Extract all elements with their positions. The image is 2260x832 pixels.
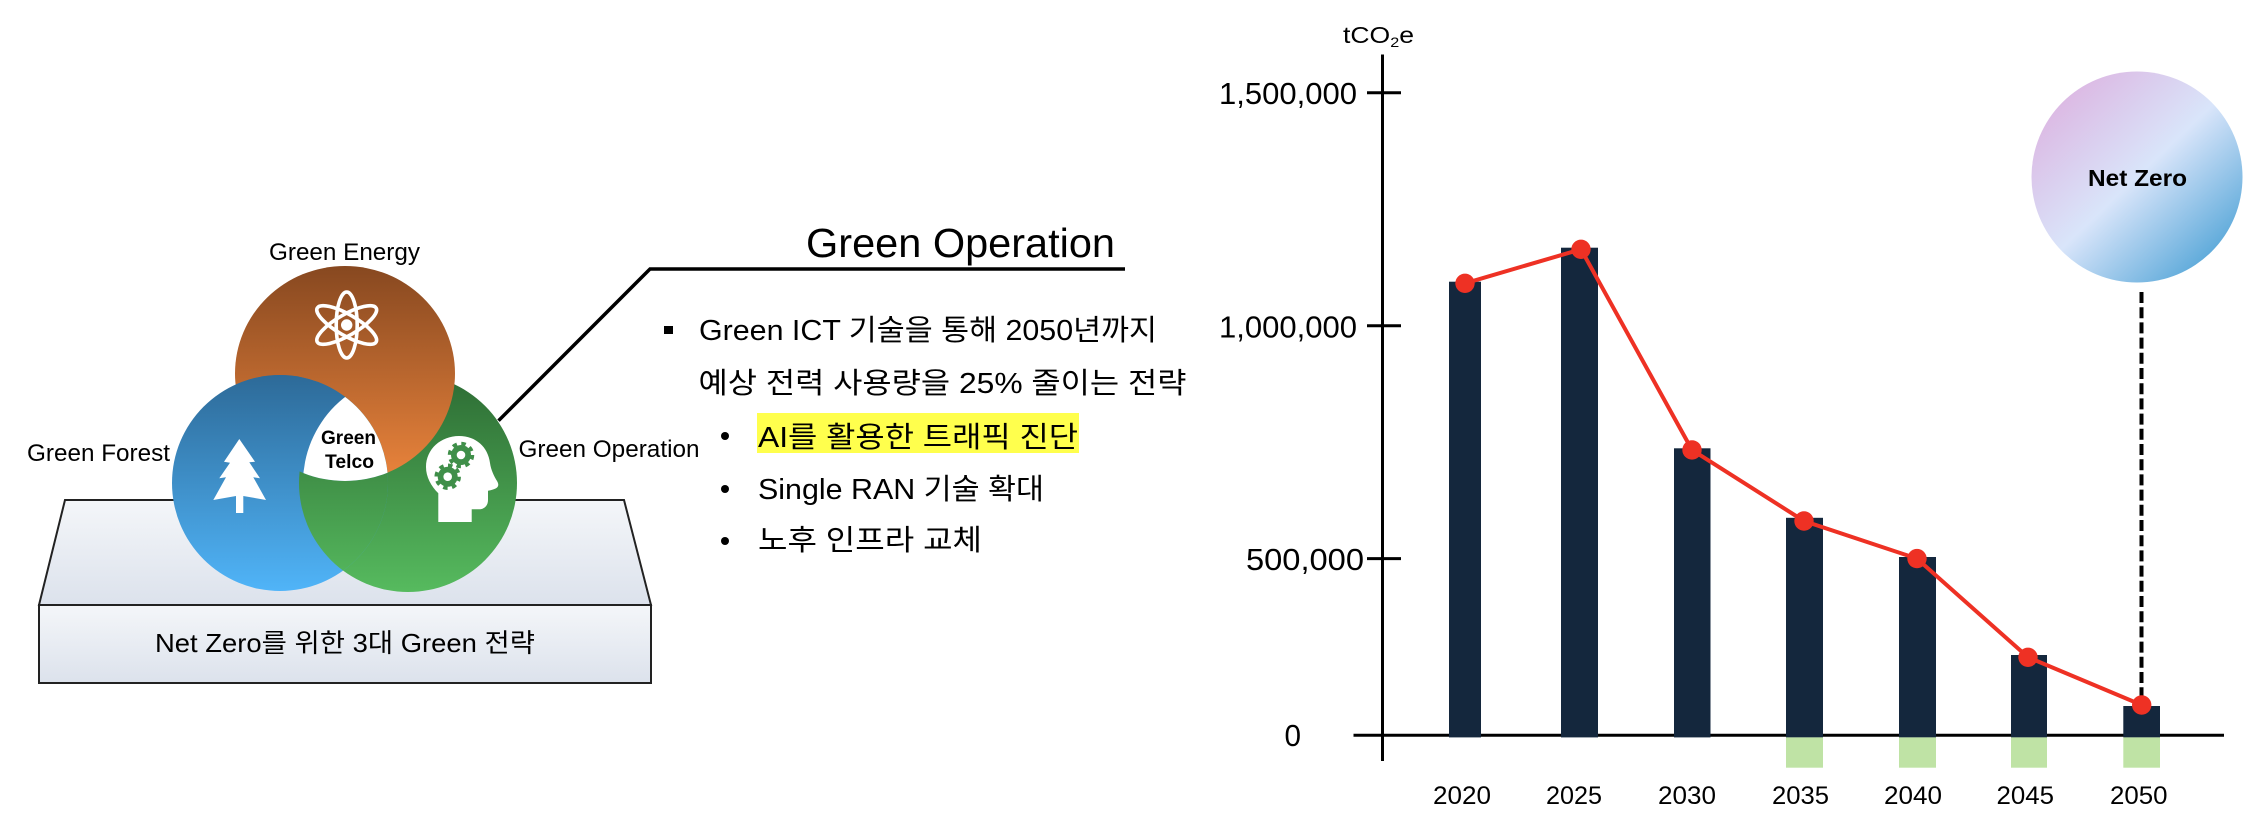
x axis labels — [1433, 782, 2168, 810]
label: Green Energy: Green Energy — [269, 239, 420, 266]
x axis labels: 2025 — [1546, 782, 1602, 810]
x axis labels: 2030 — [1658, 782, 1716, 810]
center label: Green Telco: Green — [321, 428, 376, 449]
callout line — [498, 269, 1125, 421]
main bullet text: Green ICT 기술을 통해 2050년까지 — [699, 315, 1157, 347]
center label: Green Telco: Telco — [325, 452, 374, 473]
platform caption: Net Zero를 위한 3대 Green 전략 — [155, 628, 535, 658]
x axis labels: 2045 — [1996, 782, 2054, 810]
Net Zero badge: Net Zero — [2088, 165, 2187, 191]
sub bullet: legacy infrastructure: 노후 인프라 교체 — [758, 525, 982, 557]
label: Green Forest: Green Forest — [27, 440, 170, 467]
unit label: 2 — [1390, 34, 1399, 50]
label: Green Operation: Green Operation — [518, 436, 700, 463]
icon: atom — [312, 292, 381, 358]
sub bullet: AI traffic diagnosis: AI를 활용한 트래픽 진단 — [758, 421, 1078, 454]
y axis labels: 0 — [1284, 718, 1301, 753]
sub bullet: AI traffic diagnosis — [721, 413, 1079, 454]
center label: Green Telco — [321, 428, 376, 473]
bars — [1449, 248, 2160, 737]
y axis labels: 1,000,000 — [1219, 310, 1357, 344]
heading: Green Operation — [806, 220, 1115, 266]
x axis labels: 2020 — [1433, 782, 1491, 810]
unit label: tCO — [1343, 22, 1384, 48]
y axis labels — [1219, 76, 1364, 753]
unit label: e — [1399, 22, 1414, 48]
axes and ticks — [1354, 54, 2224, 761]
sub bullet: Single RAN: Single RAN 기술 확대 — [758, 473, 1044, 506]
platform base — [39, 500, 651, 683]
x axis labels: 2040 — [1884, 782, 1942, 810]
chart: emissions to Net Zero — [1219, 22, 2242, 810]
green offset bars — [1786, 737, 2160, 768]
Net Zero badge — [2032, 72, 2242, 282]
y axis labels: 1,500,000 — [1219, 76, 1357, 111]
x axis labels: 2050 — [2110, 782, 2168, 810]
icon: tree — [213, 439, 266, 513]
venn circles — [172, 266, 521, 592]
red trend line — [1455, 240, 2151, 715]
icon: head with gears — [426, 436, 498, 522]
panel: Green Operation description — [664, 220, 1186, 557]
x axis labels: 2035 — [1772, 782, 1829, 810]
main bullet text — [664, 315, 1186, 400]
panel: Green Telco strategy diagram — [27, 239, 700, 683]
main bullet text: 예상 전력 사용량을 25% 줄이는 전략 — [698, 368, 1186, 400]
y axis labels: 500,000 — [1246, 542, 1364, 577]
dashed connector to Net Zero — [2140, 292, 2144, 700]
